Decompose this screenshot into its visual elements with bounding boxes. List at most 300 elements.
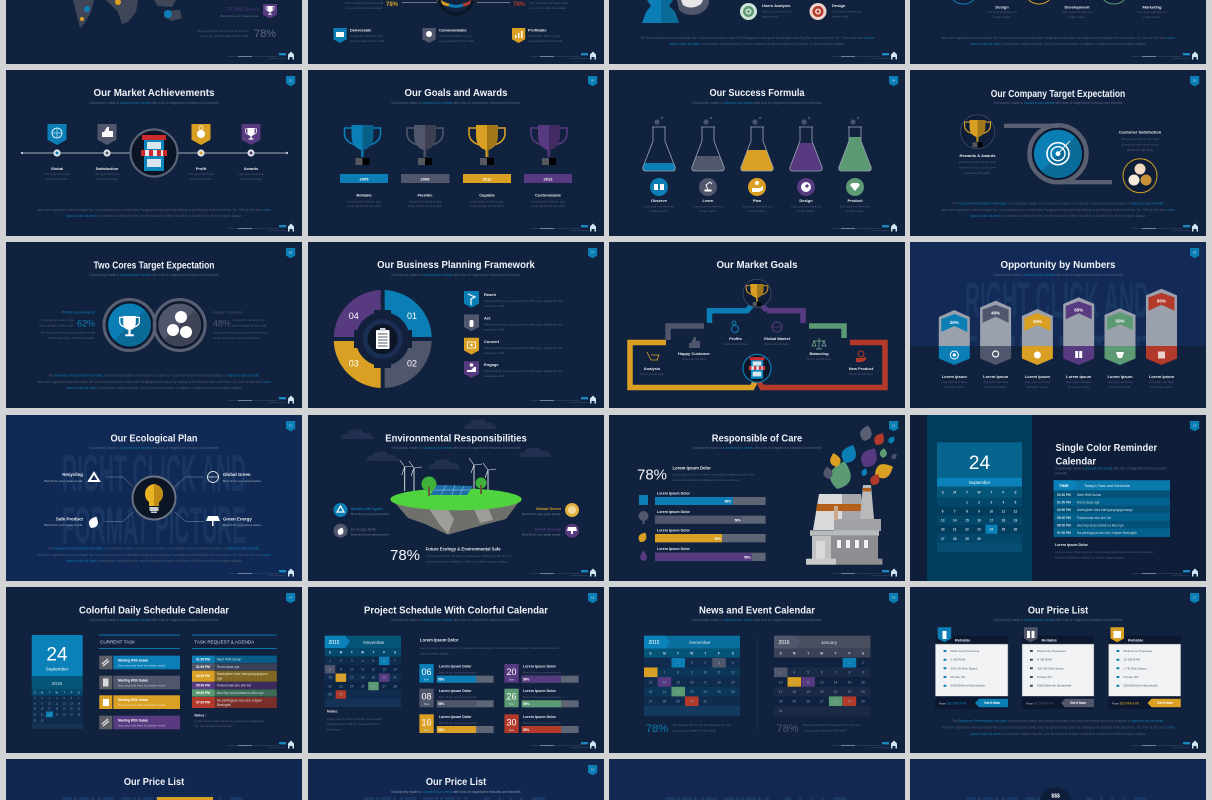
item: profitable: It would be better to put [528, 34, 560, 38]
task: 16 [419, 714, 494, 733]
calendar: january 2016: 7 [835, 671, 837, 675]
target: users analysis: Users Analysis [762, 3, 791, 8]
left stat: This is a long text here to fill [345, 1, 383, 5]
slide: money circle (cropped) [910, 759, 1206, 800]
calendar: 27 [941, 537, 945, 541]
flask: observe: better result. [650, 209, 668, 213]
body text: ipsum dolor sit amet, consectetur adipiscing elit, sed do eiusmod tempor incididunt ut labore et dolore magna aliqua. [970, 214, 1146, 218]
body text [38, 374, 271, 390]
date card: S [34, 692, 36, 694]
agenda table: Room desa nya [217, 665, 240, 669]
current task list: Use your text here for better result. [118, 724, 166, 728]
calendar: 9 [978, 510, 980, 514]
trophy: 2005 reliable: Reliable [356, 192, 372, 198]
step: reach: Please fill the you using text box with some details for the [484, 299, 563, 303]
price card: yellow: Get It Now [1157, 701, 1173, 705]
stat caption: Best fit for your great words. [220, 14, 259, 18]
target graphic [1004, 124, 1112, 184]
calendar: december 2015: 16 [690, 680, 694, 684]
stat: december: to put some details for this stuff. [672, 728, 716, 732]
title: Colorful Daily Schedule Calendar [79, 604, 229, 616]
notes [327, 710, 382, 731]
calendar: january 2016: 23 [861, 690, 865, 694]
current task list: Use your text here for better result. [118, 664, 166, 668]
left stat: so you fit it with this details. [346, 6, 383, 10]
body text [38, 208, 271, 218]
title: Our Market Goals [716, 259, 798, 271]
calendar: january 2016: January [821, 640, 838, 645]
right text: some details for this stuff. [232, 324, 267, 328]
stat: december [646, 723, 731, 735]
subtitle: Exclusively made to succeed your needs with tons of magnificent features and benefits [392, 446, 521, 450]
goal: profits: Some words here [723, 342, 748, 346]
note text: you to put some details for this stuff. [200, 34, 249, 38]
task: 26 [504, 689, 579, 707]
icon: dollar circle: $$$ [1051, 794, 1060, 800]
price card: gray: 500GB/Month Bandwidth [1037, 684, 1072, 688]
calendar: december 2015: S [732, 652, 734, 656]
calendar: january 2016: F [849, 652, 851, 656]
left stat [345, 1, 437, 10]
calendar: january 2016: 4 [793, 671, 795, 675]
calendar: january 2016: 21 [834, 690, 838, 694]
calendar: 28 [953, 537, 957, 541]
calendar: F [1002, 490, 1004, 494]
goal: happy customer [678, 337, 710, 361]
date card [32, 635, 83, 729]
column: 20%: for better result. [943, 385, 965, 389]
task: 30 [504, 714, 579, 733]
right stat: This is a long text here to fill [529, 1, 568, 5]
title: Environmental Responsibilities [385, 432, 527, 444]
calendar: 6 [383, 659, 385, 663]
calendar: 6 [942, 510, 944, 514]
item: deliverable [334, 28, 385, 43]
schedule table: Meet With Susan [1077, 493, 1101, 497]
calendar: 22 [328, 684, 332, 688]
slide: our price list, subtitle (cropped) [308, 759, 604, 800]
subtitle: Exclusively made to succeed your needs with tons of magnificent features and benefits [392, 790, 521, 794]
calendar: 14 [953, 518, 957, 522]
schedule table: 01:00 PM [1057, 493, 1071, 497]
slide: our company target expectation [910, 70, 1206, 236]
notes: tempor incididunt ut labore et dolore magna aliqua. [1055, 556, 1125, 560]
schedule table: 06:00 PM [1057, 523, 1071, 527]
trophy: 2008 flexible: Flexible [418, 192, 433, 198]
flask: observe: Observe [651, 198, 668, 203]
footer [530, 52, 596, 60]
milestone: profit [188, 124, 214, 181]
slide: our market achievements [6, 70, 302, 236]
task: 06 [419, 664, 494, 683]
title: Our Price List [426, 776, 487, 788]
agenda table: 05:00 PM [196, 684, 210, 688]
item: commandable [422, 28, 474, 43]
calendar: january 2016: 11 [793, 680, 796, 684]
item: deliverable: It would be better to put [350, 34, 382, 38]
trophy: 2012 customizable: It would be better to put [532, 200, 564, 204]
calendar: 10 [350, 667, 354, 671]
step: engage: awesome stuff. [484, 374, 505, 378]
left stat: 78% [386, 2, 399, 8]
notes: Lorem Ipsum Dolor [1055, 543, 1089, 547]
core: customers [154, 300, 205, 350]
calendar: 18 [1002, 518, 1005, 522]
task: 20 [504, 664, 579, 683]
milestone: global [44, 124, 70, 181]
page badge: 10 [289, 424, 293, 428]
target: users analysis: better result. [762, 14, 779, 18]
date card: 2 [41, 697, 43, 700]
task: 06: Nov [424, 678, 430, 682]
item: global green: Global Green [223, 472, 251, 477]
item: green energy: Best fit for your great words. [522, 532, 561, 536]
date card: T [49, 692, 51, 694]
intro text [420, 638, 559, 655]
calendar: january 2016: 3 [780, 671, 782, 675]
schedule table: Today's Task and Schedule [1084, 484, 1130, 488]
date card: F [71, 692, 73, 694]
item: global green [522, 503, 579, 517]
column: 15%: for better result. [1027, 385, 1048, 389]
flask: learn: Learn [703, 198, 714, 203]
title: Our Success Formula [710, 87, 805, 99]
subtitle: Exclusively made to succeed your needs with tons of magnificent features and benefits [692, 101, 822, 105]
task: 26: Nov [509, 702, 515, 706]
agenda table [192, 635, 277, 708]
calendar: january 2016: 25 [792, 700, 796, 704]
body text: We have organized and rearrange the Lorem ipsum just to make this Paragraph looks good by adding some English here and there. So, This is the real Lorem [38, 553, 271, 557]
factory [806, 485, 882, 565]
bar: gray [638, 510, 766, 524]
flask: product: Use your text here for [840, 204, 870, 208]
chess figure graphic [642, 0, 709, 23]
trophy: 2008 flexible: some details for this stuff. [407, 204, 443, 208]
connectors [105, 477, 204, 521]
calendar [937, 442, 1022, 552]
column: 50% [1104, 308, 1136, 389]
price card: blue: 300 GB Disk Space [950, 666, 978, 670]
calendar: 29 [328, 693, 332, 697]
body text: We have organized and rearrange the Lorem ipsum just to make this Paragraph looks good by adding some English here and there. So, This is the real Lorem [640, 36, 874, 40]
calendar: december 2015: 24 [704, 690, 707, 694]
item: commandable: It would be better to put [439, 34, 471, 38]
title: Responsible of Care [712, 432, 802, 444]
goal: new product: Some words here [849, 372, 873, 376]
subtitle: Exclusively made to succeed your needs with tons of magnificent features and benefits [994, 618, 1123, 622]
slide: our goals and awards [308, 70, 604, 236]
calendar: 3 [351, 659, 353, 663]
page badge [889, 76, 898, 86]
calendar: january 2016: 2 [862, 661, 864, 665]
milestone: profit: Profit [196, 166, 207, 171]
calendar: december 2015: 7 [664, 671, 666, 675]
calendar: November [363, 640, 385, 645]
item: green energy [206, 516, 262, 527]
yellow price card top [157, 797, 213, 800]
task: 06: 56% [438, 678, 445, 682]
item: green energy: Green Energy [223, 516, 252, 522]
milestone: satisfaction: for better result. [96, 177, 118, 181]
date card: S [78, 692, 80, 694]
calendar: 22 [965, 528, 969, 532]
calendar: january 2016: 26 [806, 700, 810, 704]
calendar: S [394, 650, 396, 654]
date card: 28 [78, 714, 81, 716]
calendar: 13 [382, 667, 386, 671]
price card: gray: Multi-Core Processor [1037, 649, 1066, 653]
price card: gray: 8 GB RAM [1037, 658, 1052, 662]
notes [1055, 543, 1153, 560]
column: 40%: Use your text here [983, 380, 1009, 384]
task: 06: 06 [421, 667, 432, 677]
left text: We recommend you to put a little words [41, 330, 95, 334]
item: global green: Global Green [536, 506, 562, 511]
title: Our Company Target Expectation [991, 88, 1125, 100]
icon: purple trophy badge [263, 4, 277, 18]
calendar: 9 [340, 667, 342, 671]
price card: yellow: 16 GB RAM [1124, 658, 1140, 662]
calendar: january 2016: 5 [807, 671, 809, 675]
item: rewards and awards [959, 115, 996, 175]
task: 26: 26 [506, 692, 517, 702]
step: engage [464, 361, 563, 378]
icon circles (cropped) [948, 0, 1129, 4]
current task list: Meeting With Susan [118, 718, 148, 722]
calendar: december 2015: 3 [704, 661, 706, 665]
title: News and Event Calendar [699, 604, 815, 616]
slide: watermark background (cropped) [609, 759, 905, 800]
slide: two cores target expectation [6, 242, 302, 408]
item: ecology safe: Best fit for your great words. [351, 532, 390, 536]
stat: 78%: 78% [637, 466, 667, 484]
subtitle: Exclusively made to succeed your needs with tons of magnificent features and benefits [90, 446, 219, 450]
donut chart: 02 [407, 358, 417, 368]
date card: 22 [33, 714, 37, 716]
date card: 2015 [52, 681, 63, 686]
item: green life cycle: Best fit for your great words. [351, 512, 390, 516]
step: engage: Please fill the you using text box with some details for the [484, 369, 563, 373]
calendar: january 2016: 17 [779, 690, 783, 694]
body text [942, 719, 1175, 736]
calendar: 1 [966, 500, 968, 504]
goal: balancing: Balancing [809, 351, 829, 356]
item: green energy [522, 524, 579, 538]
slide: environmental responsibilities [308, 415, 604, 581]
left text: 62% [77, 318, 95, 328]
body text: The Awesome Presentation Template is exclusively made and create to exceed our customer needs with best analysis of features and benefits. [48, 374, 260, 378]
calendar: W [361, 650, 364, 654]
column: 50%: Use your text here [1107, 380, 1133, 384]
calendar: january 2016: 20 [820, 690, 824, 694]
bar: purple: Lorem Ipsum Dolor [657, 547, 691, 551]
slide: three services (cropped) [910, 0, 1206, 64]
intro text: Lorem Ipsum Dolor [420, 638, 459, 642]
task: 26: 56% [523, 702, 530, 706]
calendar: T [966, 490, 968, 494]
item: safe product: Safe Product [56, 516, 84, 522]
floating island [390, 458, 522, 535]
calendar: december 2015: 18 [717, 680, 721, 684]
step: reach [464, 291, 563, 308]
date card: 10 [48, 702, 51, 705]
body text [942, 202, 1175, 218]
calendar: january 2016: 19 [806, 690, 810, 694]
item: ecology safe: Ecology Safe [351, 526, 377, 532]
page badge: 15 [591, 596, 595, 600]
flask: product: Product [847, 198, 863, 203]
calendar: december 2015: 10 [704, 671, 707, 675]
right text: 48% [213, 318, 231, 328]
leaves [822, 424, 898, 492]
calendar: january 2016: 14 [834, 680, 838, 684]
calendar: 19 [1014, 518, 1017, 522]
calendar: january 2016: M [793, 652, 796, 656]
bar: blue: Lorem Ipsum Dolor [657, 492, 691, 496]
column: 80%: for better result. [1151, 385, 1172, 389]
item: green life cycle: Green Life Cycle [351, 506, 383, 511]
item: customer satisfaction: details for this stuff. [1127, 148, 1153, 152]
trophy: 2005 reliable [340, 125, 388, 208]
calendar: 21 [953, 528, 957, 532]
step: convert [464, 338, 563, 355]
item: recycling [44, 472, 99, 483]
calendar: december 2015: M [663, 652, 666, 656]
calendar: T [372, 650, 374, 654]
trophy: 2011 capable [463, 125, 511, 208]
price card: yellow [1108, 627, 1181, 709]
body text: We have organized and rearrange the Lorem ipsum just to make this Paragraph looks good by adding some English here and there. So, This is the real Lorem [942, 726, 1175, 730]
target: design: Design [832, 3, 846, 8]
stat text: Future Ecology & Environmental Safe [426, 546, 501, 552]
left text: some details for this stuff. [39, 324, 74, 328]
subtitle: benefits. [1056, 472, 1068, 476]
calendar: 23 [977, 528, 981, 532]
slide: our price list, yellow card (cropped) [6, 759, 302, 800]
step: reach: Reach [484, 292, 497, 297]
slide: our business planning framework [308, 242, 604, 408]
date card: 14 [78, 702, 81, 705]
flask: design: better result. [797, 209, 815, 213]
notes: incididunt. [327, 727, 341, 731]
stat: january: 78% [776, 723, 799, 735]
note text: We provide this as the best fit area for [197, 29, 249, 33]
flask: plan: Plan [753, 198, 762, 203]
calendar: january 2016: 31 [779, 709, 783, 713]
stat text: Lorem Ipsum Dolor [672, 466, 711, 470]
item: customer satisfaction: fit area for you to put some [1122, 142, 1159, 146]
column: 20% [939, 310, 970, 389]
clouds [341, 419, 551, 469]
donut chart [334, 290, 432, 388]
calendar: 4 [362, 659, 364, 663]
calendar: 14 [393, 667, 397, 671]
milestone: satisfaction: Use your text here [94, 172, 120, 176]
calendar: 11 [361, 667, 364, 671]
notes: adipiscing elit, sed do eiusmod tempor [327, 722, 380, 726]
page badge [286, 421, 295, 431]
schedule table: 07:00 PM [1057, 531, 1071, 535]
page badge: 16 [892, 596, 896, 600]
calendar: 11 [1002, 510, 1005, 514]
footer [228, 568, 294, 576]
column: 40%: for better result. [985, 385, 1007, 389]
left text [39, 310, 95, 340]
milestone: global: Use your text here [44, 172, 70, 176]
item: customer satisfaction: Customer Satisfaction [1119, 130, 1162, 134]
item: recycling: Recycling [62, 472, 83, 477]
task: 16: Lorem Ipsum Dolor [439, 715, 472, 719]
item: rewards and awards: We provide this as the best [959, 160, 996, 164]
task: 16: 16 [421, 717, 432, 727]
calendar: december 2015: 12 [731, 671, 735, 675]
stat text: Lorem ipsum dolor sit amet, consectetur adipiscing elit, sed do [426, 554, 511, 558]
body text: ipsum dolor sit amet, consectetur adipiscing elit, sed do eiusmod tempor incididunt ut labore et dolore magna aliqua. [970, 732, 1146, 736]
timeline [21, 149, 288, 157]
trophy: 2011 capable: Capable [479, 192, 496, 198]
trophy: 2008 flexible: It would be better to put [409, 200, 441, 204]
page badge: 17 [1193, 596, 1197, 600]
calendar: 20 [382, 676, 386, 680]
footer [228, 224, 294, 232]
stat: 78,000 users: 78,000 Users [226, 7, 260, 13]
subtitle: Exclusively made to succeed your needs with tons of magnificent features and benefits [392, 101, 521, 105]
date card: 13 [70, 702, 73, 705]
body text [640, 36, 874, 46]
calendar: december 2015: December [689, 640, 711, 645]
calendar: december 2015: 8 [677, 671, 679, 675]
watermark tops [62, 797, 243, 800]
schedule table: Pokemonak eko anh luh [1077, 516, 1111, 520]
body text: We have organized and rearrange the Lorem ipsum just to make this Paragraph looks good by adding some English here and there. So, This is the real Lorem [38, 380, 271, 384]
calendar: T [990, 490, 992, 494]
icon: store [130, 130, 178, 176]
calendar: december 2015: 14 [663, 680, 666, 684]
price card: yellow: From $29/Month [1112, 700, 1139, 706]
watermark tops [665, 797, 846, 800]
ring chart [437, 0, 475, 14]
date card: September [46, 666, 69, 672]
step: act: awesome stuff. [484, 327, 505, 331]
note text [197, 29, 249, 38]
subtitle: Exclusively made to succeed your needs with tons of magnificent features and benefits [994, 101, 1123, 105]
calendar: 2 [340, 659, 342, 663]
calendar: 17 [990, 518, 993, 522]
current task list: CURRENT TASK [100, 640, 136, 644]
price card: yellow: Multi-Core Processor [1124, 649, 1153, 653]
stat text [426, 546, 511, 564]
item: commandable: some details for this stuff. [439, 39, 474, 43]
subtitle: Exclusively made to succeed your needs with tons of magnificent features and benefits [994, 273, 1123, 277]
date card: 24 [46, 644, 68, 666]
column: 15% [1022, 309, 1053, 389]
slide: analysis targets (cropped) [609, 0, 905, 64]
trophy: 2008 flexible: 2008 [421, 176, 430, 181]
title: Our Business Planning Framework [377, 259, 535, 271]
date card: T [63, 692, 65, 694]
date card: 4 [56, 697, 58, 700]
body text: The Awesome Presentation Template is exclusively made and create to exceed our customer needs with best analysis of features and benefits. [952, 202, 1164, 206]
subtitle: Exclusively made to succeed your needs with tons of magnificent features and benefits [692, 446, 822, 450]
date card: 11 [56, 702, 59, 705]
notes: Lorem ipsum dolor sit amet, consectetur [327, 717, 382, 721]
slide: our price list [910, 587, 1206, 753]
slide: single color reminder calendar [910, 415, 1206, 581]
icon: light bulb [132, 476, 176, 520]
bar: gray: 56% [735, 518, 741, 522]
slide: colorful daily schedule calendar [6, 587, 302, 753]
page badge: 13 [1193, 424, 1197, 428]
